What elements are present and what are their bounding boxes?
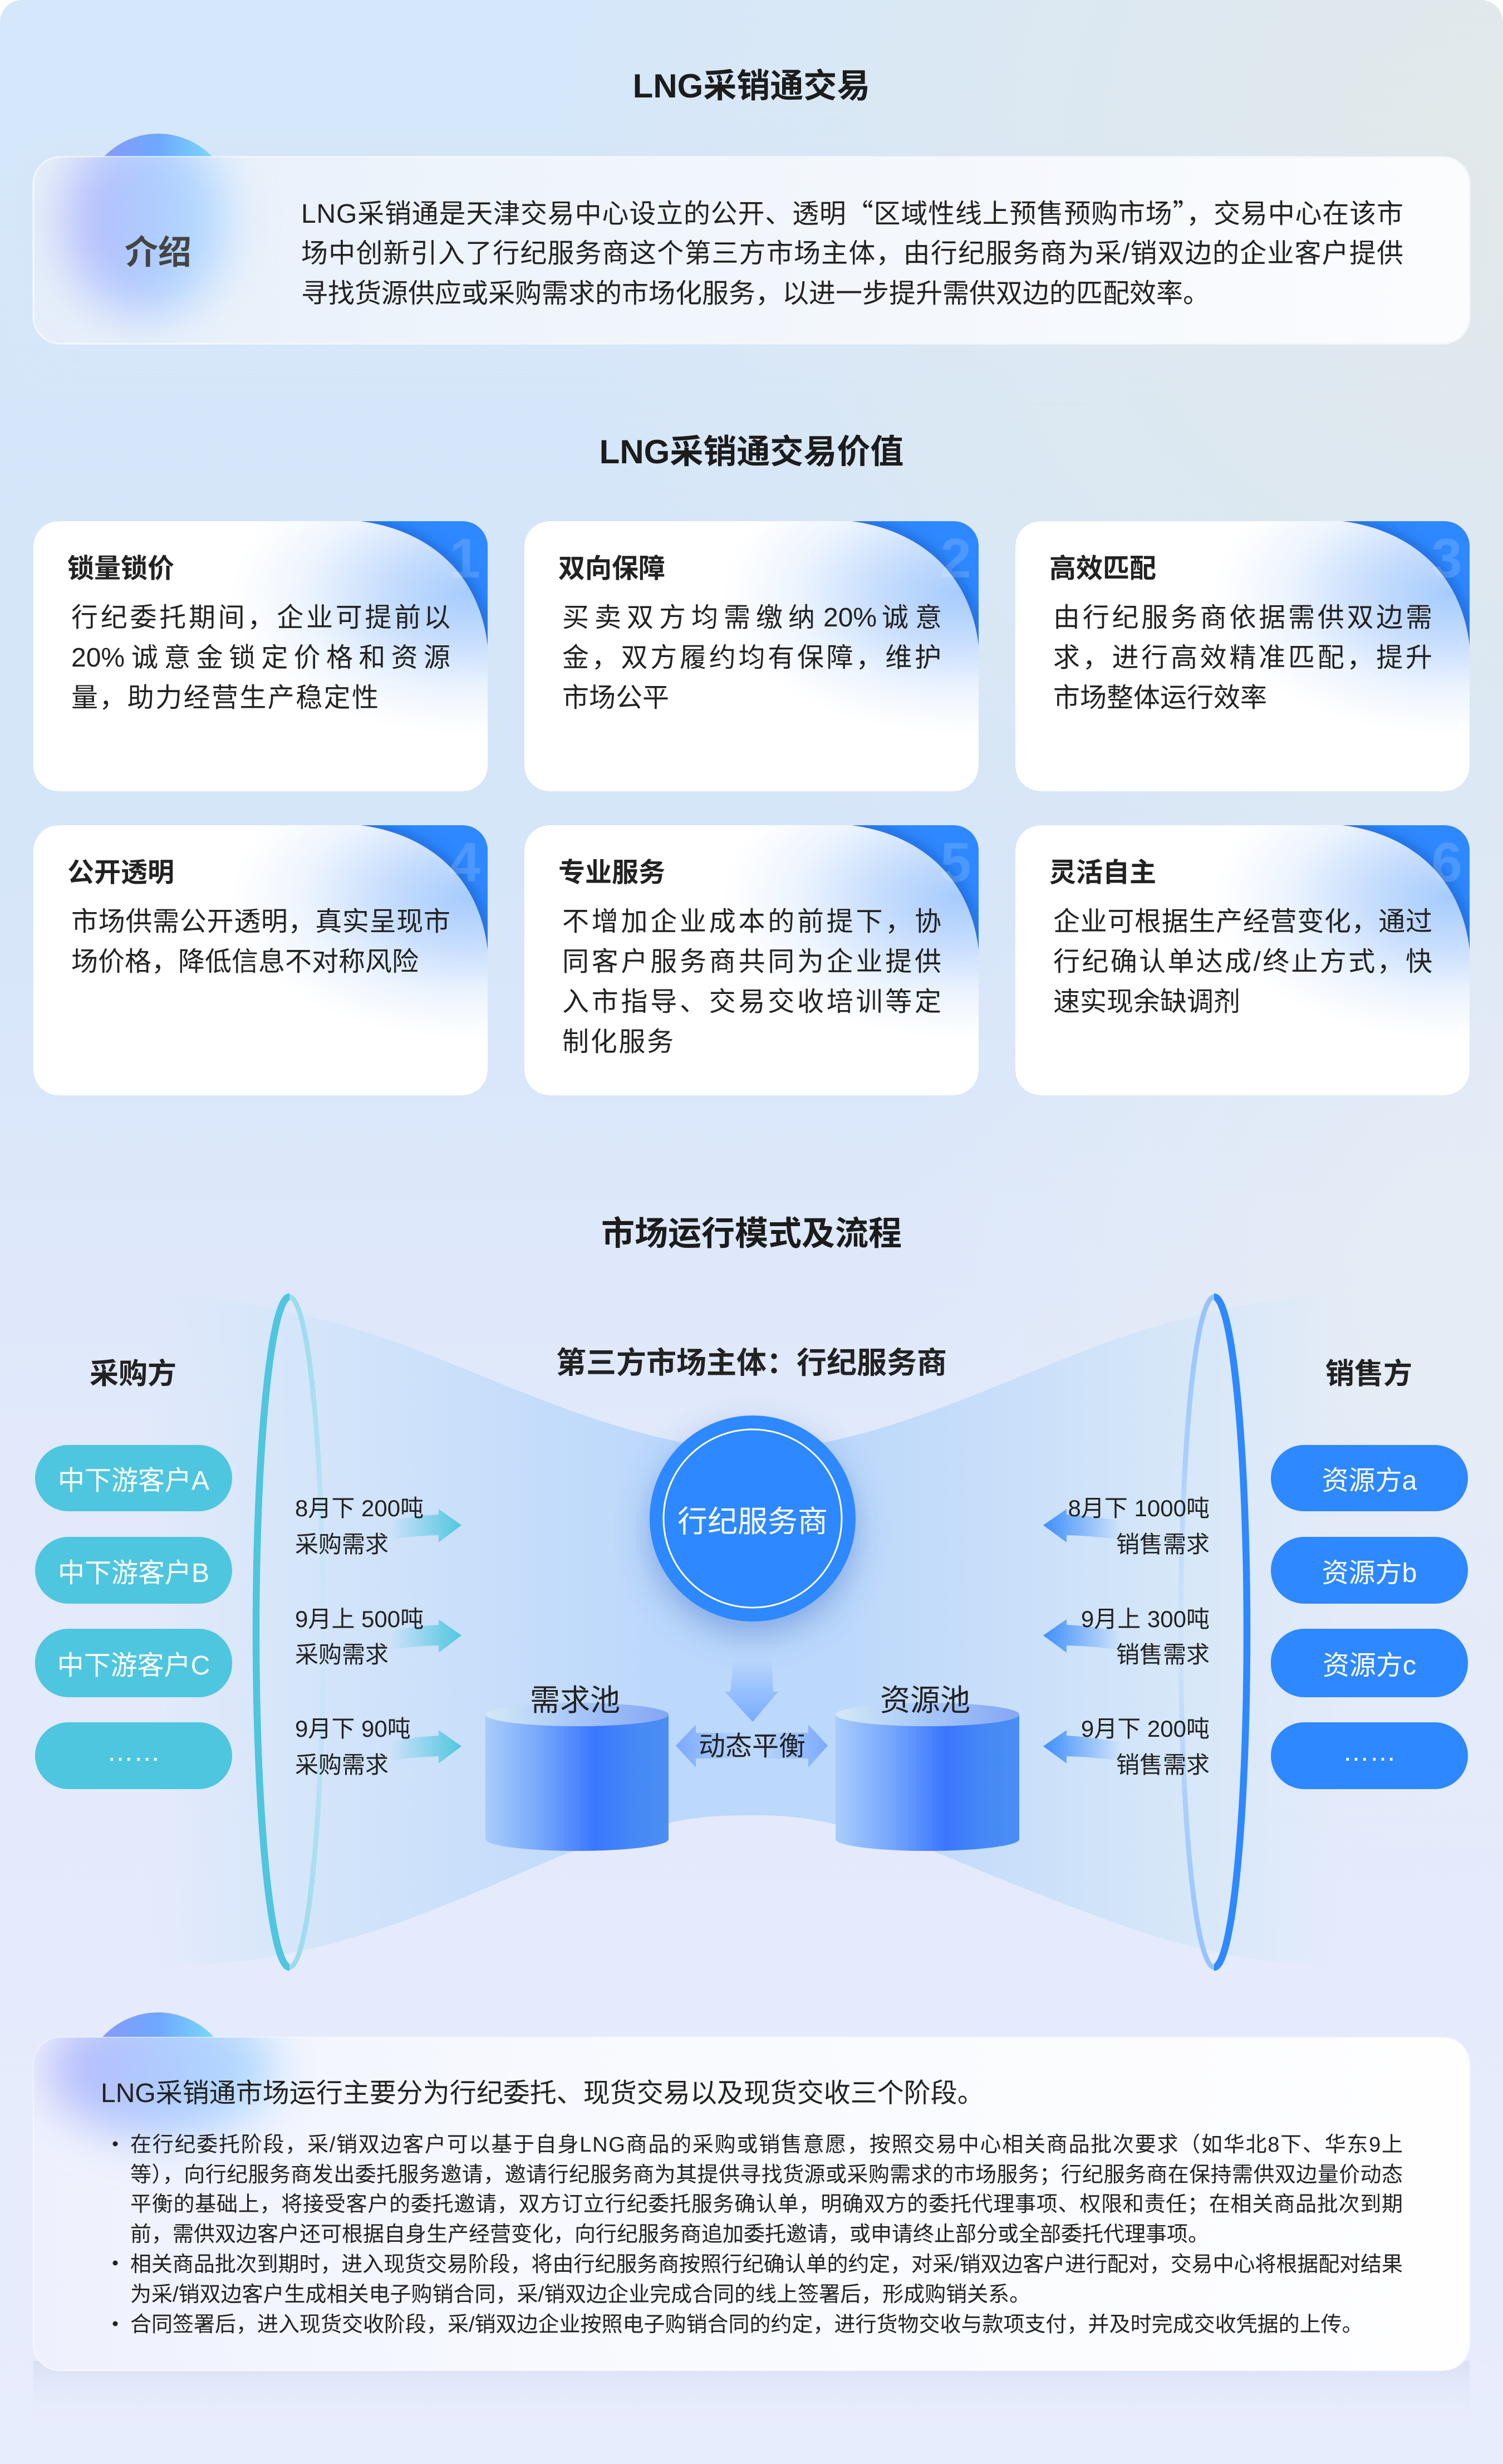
glass card [33, 2037, 1470, 2370]
frosted blur glow [47, 1999, 276, 2138]
panel: value card 6 [1015, 825, 1470, 1095]
seller supply labels: 销售需求 [1116, 1752, 1210, 1778]
bullets: 平衡的基础上，将接受客户的委托邀请，双方订立行纪委托服务确认单，明确双方的委托代理事项、权限和责任；在相关商品批次到期 [130, 2193, 1403, 2216]
card body: 量，助力经营生产稳定性 [71, 683, 379, 713]
intro text: LNG采销通是天津交易中心设立的公开、透明“区域性线上预售预购市场”，交易中心在该市 [301, 192, 1403, 231]
number: 6 [1431, 831, 1462, 894]
resource pool cylinder [836, 1684, 1019, 1851]
resource pool cylinder: 资源池 [880, 1684, 970, 1717]
buyer demand labels [295, 1495, 424, 1778]
seller supply labels: 销售需求 [1116, 1531, 1210, 1557]
buyer demand labels: 8月下 200吨 [295, 1495, 424, 1521]
left ellipse [256, 1297, 323, 1967]
decorative circle behind card [83, 2012, 233, 2163]
card body: 制化服务 [562, 1027, 674, 1057]
intro text: 寻找货源供应或采购需求的市场化服务，以进一步提升需供双边的匹配效率。 [301, 279, 1210, 308]
card shadow [33, 2361, 1470, 2422]
flow diagram [35, 1294, 1468, 1967]
card body: 场价格，降低信息不对称风险 [71, 947, 419, 977]
seller supply labels: 9月下 200吨 [1081, 1716, 1210, 1742]
number: 5 [940, 831, 971, 894]
card body: 市场公平 [562, 683, 669, 713]
card body: 行纪确认单达成/终止方式，快 [1053, 947, 1432, 977]
card body: 市场供需公开透明，真实呈现市 [71, 907, 450, 937]
broker circle: 行纪服务商 [677, 1505, 828, 1539]
card body: 诚意 [882, 603, 942, 633]
right ellipse [1181, 1297, 1247, 1967]
card body: 由行纪服务商依据需供双边需 [1053, 603, 1432, 633]
buyer pills: 中下游客户A [58, 1466, 209, 1496]
decorative circle behind card [83, 134, 233, 284]
intro text: 场中创新引入了行纪服务商这个第三方市场主体，由行纪服务商为采/销双边的企业客户提供 [301, 239, 1403, 268]
panel: value card 4 [33, 825, 488, 1095]
broker circle [650, 1415, 856, 1622]
number: 1 [449, 527, 480, 590]
bullets: 相关商品批次到期时，进入现货交易阶段，将由行纪服务商按照行纪确认单的约定，对采/销双边客户进行配对，交易中心将根据配对结果 [130, 2253, 1403, 2276]
card title: 双向保障 [558, 554, 665, 584]
card title: 灵活自主 [1049, 858, 1156, 888]
intro text [301, 192, 1403, 308]
frosted blur glow [65, 125, 227, 315]
card body: 企业可根据生产经营变化，通过 [1053, 907, 1432, 937]
card body: 市场整体运行效率 [1053, 683, 1267, 713]
panel: value card 3 [1015, 521, 1470, 791]
card body [71, 603, 450, 713]
bullets: 等），向行纪服务商发出委托服务邀请，邀请行纪服务商为其提供寻找货源或采购需求的市场服务；行纪服务商在保持需供双边量价动态 [130, 2163, 1403, 2187]
panel: market stages [33, 1999, 1470, 2422]
card background [524, 825, 979, 1095]
seller supply labels: 9月上 300吨 [1081, 1606, 1210, 1632]
card title: 高效匹配 [1049, 554, 1156, 584]
card background [33, 521, 488, 791]
card body: 求，进行高效精准匹配，提升 [1053, 643, 1432, 673]
card title: 公开透明 [67, 858, 174, 888]
bullets: 为采/销双边客户生成相关电子购销合同，采/销双边企业完成合同的线上签署后，形成购销关系。 [130, 2283, 1030, 2306]
number: 2 [940, 527, 971, 590]
glass card [33, 157, 1470, 344]
seller supply labels: 8月下 1000吨 [1068, 1495, 1210, 1521]
card background [1015, 521, 1470, 791]
seller pills [1271, 1445, 1468, 1789]
buyer pills: 中下游客户B [58, 1559, 209, 1588]
seller heading: 销售方 [1325, 1358, 1412, 1390]
number: 4 [449, 831, 480, 894]
card body: 速实现余缺调剂 [1053, 987, 1240, 1017]
buyer demand labels: 采购需求 [295, 1752, 389, 1778]
buyer demand labels: 9月下 90吨 [295, 1716, 411, 1742]
card body: 金，双方履约均有保障，维护 [562, 643, 941, 673]
panel: value card 1 [33, 521, 488, 791]
card body: 20% [823, 603, 877, 633]
bullets: 在行纪委托阶段，采/销双边客户可以基于自身LNG商品的采购或销售意愿，按照交易中心相关商品批次要求（如华北8下、华东9上 [130, 2133, 1403, 2157]
seller pills: 资源方a [1322, 1466, 1417, 1496]
card body: 行纪委托期间，企业可提前以 [71, 603, 450, 633]
bullets [112, 2133, 1403, 2336]
buyer pills [35, 1445, 232, 1789]
demand pool cylinder [485, 1684, 669, 1851]
balance arrows: 动态平衡 [699, 1732, 805, 1761]
demand pool cylinder: 需求池 [530, 1684, 620, 1717]
seller pills: 资源方b [1322, 1559, 1417, 1588]
heading: 介绍: 介绍 [125, 234, 191, 271]
panel: introduction [32, 134, 1471, 344]
number: 3 [1431, 527, 1462, 590]
seller arrows [1043, 1509, 1121, 1764]
card body: 20% [71, 643, 125, 673]
card body: 买卖双方均需缴纳 [562, 603, 815, 633]
card background [524, 521, 979, 791]
buyer pills: 中下游客户C [57, 1651, 210, 1681]
seller pills: 资源方c [1323, 1651, 1416, 1681]
seller supply labels [1068, 1495, 1210, 1778]
buyer heading: 采购方 [90, 1358, 176, 1390]
card title: 专业服务 [558, 858, 665, 888]
card body: 入市指导、交易交收培训等定 [562, 987, 941, 1017]
down arrow [725, 1659, 778, 1722]
third party heading: 第三方市场主体：行纪服务商 [556, 1346, 947, 1380]
heading: value: LNG采销通交易价值 [600, 433, 903, 471]
bullets: 前，需供双边客户还可根据自身生产经营变化，向行纪服务商追加委托邀请，或申请终止部分或全部委托代理事项。 [130, 2223, 1209, 2246]
panel: value card 2 [524, 521, 979, 791]
card background [33, 825, 488, 1095]
card body [562, 603, 942, 713]
heading: market flow: 市场运行模式及流程 [601, 1215, 902, 1252]
card body: 诚意金锁定价格和资源 [131, 643, 450, 673]
panel: value card 5 [524, 825, 979, 1095]
buyer arrows [390, 1509, 461, 1764]
seller pills: …… [1343, 1737, 1396, 1767]
buyer demand labels: 采购需求 [295, 1642, 389, 1668]
card body [71, 907, 450, 977]
balance arrows [676, 1725, 828, 1767]
buyer pills: …… [107, 1737, 160, 1767]
card body [1053, 907, 1432, 1017]
card shadow [33, 167, 1470, 390]
card title: 锁量锁价 [67, 554, 174, 584]
title: LNG采销通交易 [633, 67, 870, 105]
card body: 不增加企业成本的前提下，协 [562, 907, 941, 937]
bullets: 合同签署后，进入现货交收阶段，采/销双边企业按照电子购销合同的约定，进行货物交收与款项支付，并及时完成交收凭据的上传。 [130, 2313, 1363, 2336]
lead sentence: LNG采销通市场运行主要分为行纪委托、现货交易以及现货交收三个阶段。 [101, 2079, 984, 2108]
card background [1015, 825, 1470, 1095]
seller supply labels: 销售需求 [1116, 1642, 1210, 1668]
funnel band [149, 1294, 1353, 1966]
buyer demand labels: 采购需求 [295, 1531, 389, 1557]
card body [1053, 603, 1432, 713]
card body [562, 907, 941, 1057]
buyer demand labels: 9月上 500吨 [295, 1606, 424, 1632]
card body: 同客户服务商共同为企业提供 [562, 947, 941, 977]
